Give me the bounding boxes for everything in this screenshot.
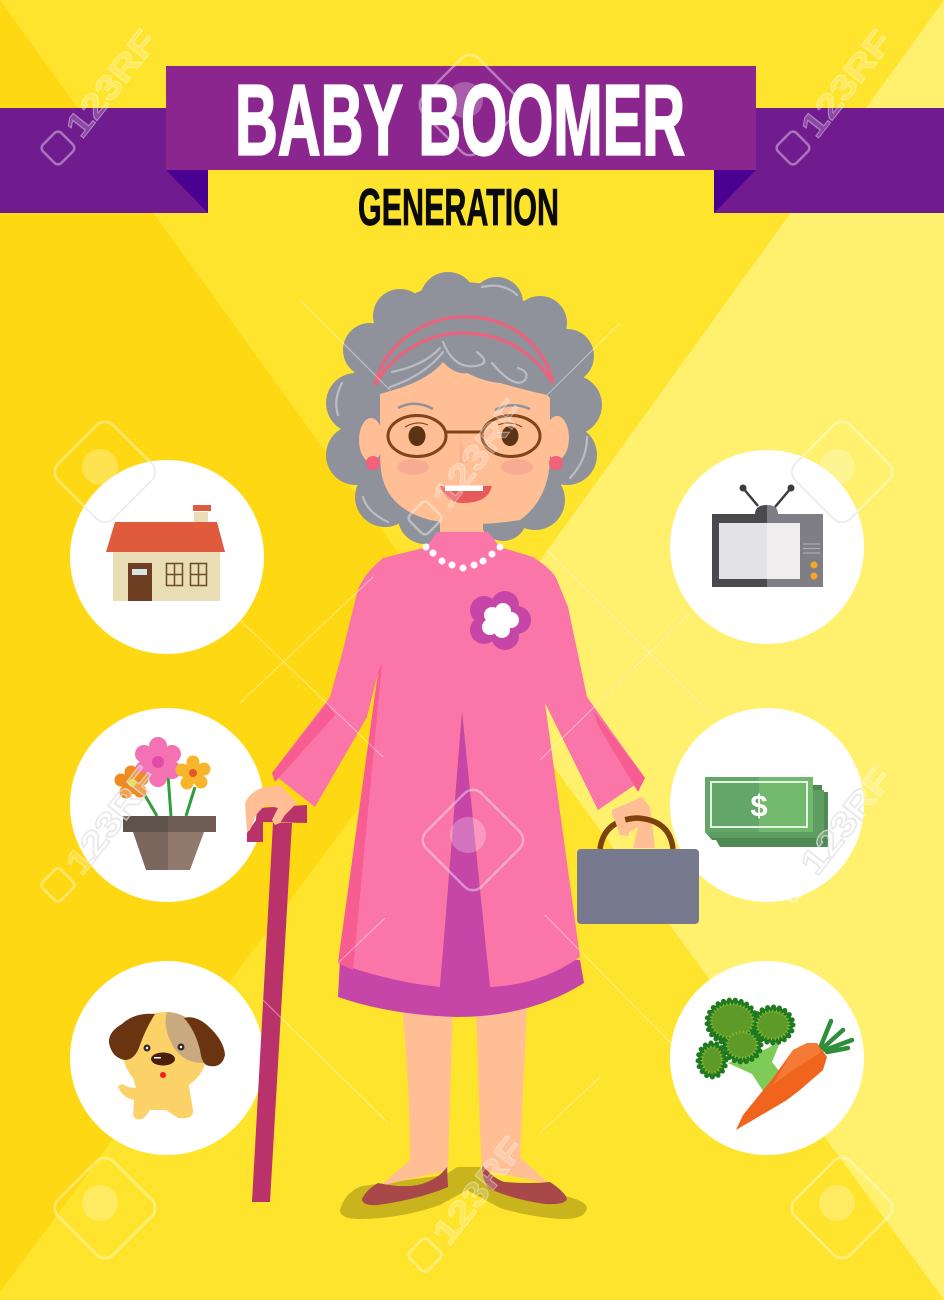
watermark: 123RF (425, 1130, 532, 1252)
watermark: 123RF (793, 23, 900, 145)
panel: dog circle (70, 961, 264, 1155)
neck (440, 510, 483, 550)
eyes (405, 423, 522, 446)
icon: carrot (736, 1021, 852, 1130)
shoes (362, 1165, 567, 1205)
watermark inside circles: 123RF (793, 760, 900, 882)
face (380, 362, 550, 524)
ground shadow (340, 1167, 587, 1219)
panel: vegetables circle (670, 961, 864, 1155)
panel: money circle (670, 708, 864, 902)
brooch (470, 591, 531, 650)
headband (375, 317, 553, 385)
handbag (577, 849, 699, 924)
panel: flower pot circle (70, 708, 264, 902)
icon: broccoli (698, 1000, 793, 1094)
panel: house circle (70, 460, 264, 654)
watermark: 123RF (793, 760, 900, 882)
skirt (338, 960, 584, 1017)
cheeks (397, 459, 533, 475)
watermark inside circles: 123RF (58, 760, 165, 882)
right hand and bag handle (600, 797, 673, 849)
watermark: 123RF (58, 760, 165, 882)
hair highlights (336, 286, 587, 522)
earrings (366, 456, 563, 470)
watermark inside circles (50, 417, 900, 882)
mouth (440, 486, 492, 503)
eyebrows (398, 404, 530, 410)
panel: money circle: $ (750, 788, 768, 823)
subtitle: GENERATION (358, 179, 559, 237)
coat (272, 532, 645, 987)
cane (247, 805, 307, 1202)
watermark: 123RF (58, 23, 165, 145)
necklace (422, 544, 504, 572)
legs (380, 1005, 548, 1186)
glasses (388, 416, 540, 456)
banner ribbon (0, 66, 944, 213)
left hand (245, 785, 297, 832)
panel: television circle (670, 450, 864, 644)
ears (359, 418, 383, 462)
nose (459, 437, 468, 464)
watermark: 123RF (425, 393, 532, 515)
character: grandmother (245, 272, 699, 1219)
hair (326, 272, 602, 544)
